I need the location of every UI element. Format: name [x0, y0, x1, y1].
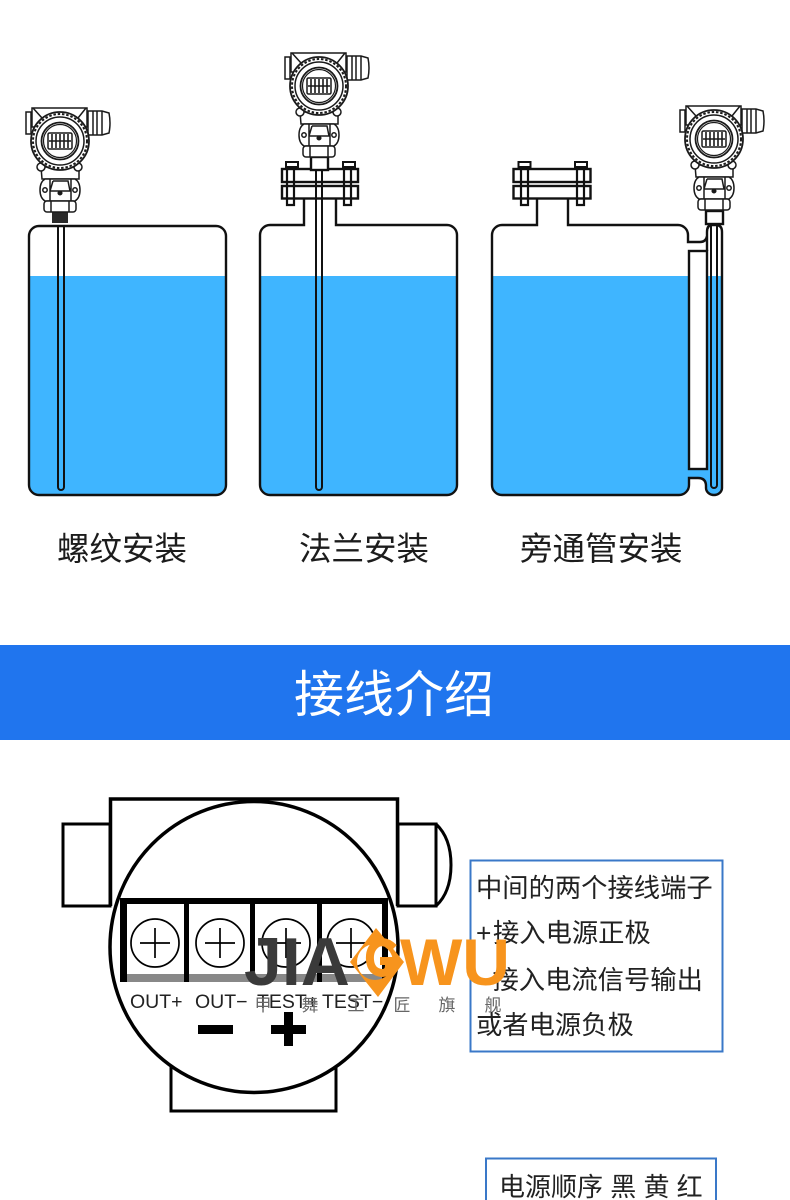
info box: middle terminals: - [480, 965, 489, 995]
label: flange installation: 法兰安装 [299, 531, 429, 567]
terminal screw 4 [327, 919, 375, 967]
terminal screw 2 [196, 919, 244, 967]
round housing [110, 802, 398, 1092]
watermark: JIAGWU brand [244, 924, 510, 1015]
info box: middle terminals: 接入电源正极 [493, 918, 651, 948]
terminal label TEST+: TEST+ [257, 991, 318, 1013]
watermark subtitle: 舞 [302, 996, 318, 1015]
info box: middle terminals: 或者电源负极 [476, 1010, 634, 1040]
terminal screw 1 [131, 919, 179, 967]
label: threaded installation: 螺纹安装 [57, 531, 187, 567]
minus symbol [198, 1025, 233, 1034]
info box: power sequence [486, 1158, 716, 1200]
tank: flange installation [260, 53, 457, 495]
left housing port [63, 824, 110, 906]
tank: bypass pipe installation [492, 106, 764, 495]
top housing box [110, 799, 398, 906]
watermark subtitle [254, 996, 502, 1015]
watermark word JIA: JIA [244, 924, 350, 1000]
right housing port with cap [398, 824, 451, 906]
terminal label TEST-: TEST− [322, 991, 383, 1013]
section banner: wiring introduction [0, 645, 790, 740]
watermark subtitle: 旗 [438, 996, 456, 1015]
bottom housing box [171, 1040, 336, 1111]
watermark subtitle: 工 [348, 996, 364, 1015]
terminal screw 3 [262, 919, 310, 967]
label: bypass pipe installation: 旁通管安装 [520, 531, 683, 567]
watermark subtitle: 匠 [394, 996, 410, 1015]
watermark logo [350, 928, 404, 997]
info box: middle terminals: 中间的两个接线端子 [476, 873, 713, 903]
watermark subtitle: 甲 [254, 996, 272, 1015]
watermark subtitle: 舰 [484, 996, 502, 1015]
info box: middle terminals: + [476, 918, 491, 948]
info box: middle terminals: 接入电流信号输出 [492, 965, 703, 995]
plus symbol [271, 1012, 306, 1046]
terminal label OUT+: OUT+ [130, 991, 183, 1013]
tank: threaded installation [26, 108, 226, 495]
wiring diagram [63, 799, 451, 1111]
terminal label OUT-: OUT− [195, 991, 248, 1013]
section banner: wiring introduction: 接线介绍 [294, 667, 494, 723]
watermark word WU: WU [400, 925, 510, 999]
info box: middle terminals [470, 860, 722, 1052]
terminal block [120, 898, 388, 982]
